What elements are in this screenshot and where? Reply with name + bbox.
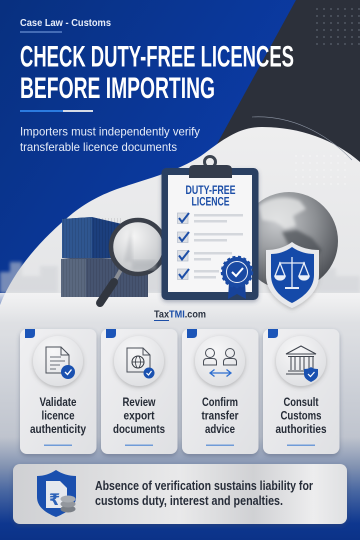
callout text: customs duty, interest and penalties. bbox=[95, 494, 283, 508]
card label: authenticity bbox=[30, 422, 86, 436]
icon: approval seal bbox=[222, 257, 252, 299]
card label: licence bbox=[42, 408, 75, 422]
title: BEFORE IMPORTING bbox=[20, 72, 215, 105]
icon: shield with rupee document and coins bbox=[37, 470, 76, 517]
subtitle: Importers must independently verify bbox=[20, 124, 200, 138]
callout text: Absence of verification sustains liability for bbox=[95, 479, 313, 493]
background: dot grid bbox=[313, 6, 360, 50]
card label: advice bbox=[205, 422, 235, 436]
card tab bbox=[106, 329, 116, 338]
card tab bbox=[268, 329, 278, 338]
clipboard clip bbox=[189, 156, 232, 178]
callout text bbox=[95, 479, 313, 508]
card tab bbox=[187, 329, 197, 338]
card label bbox=[30, 395, 86, 436]
card: validate licence authenticity bbox=[20, 329, 96, 454]
background: floor band bbox=[0, 293, 360, 323]
bottom container bbox=[61, 257, 148, 297]
clipboard paper bbox=[168, 175, 252, 292]
card label: documents bbox=[113, 422, 165, 436]
card label: authorities bbox=[276, 422, 327, 436]
icon: shield with rupee document and coins: ₹ bbox=[49, 492, 60, 509]
background: dome dots bbox=[292, 152, 346, 186]
icon: justice shield bbox=[266, 242, 319, 308]
card: review export documents bbox=[101, 329, 178, 454]
icon: globe document bbox=[114, 336, 164, 386]
clipboard board bbox=[162, 168, 258, 300]
card: consult customs authorities bbox=[263, 329, 340, 454]
card tab bbox=[25, 329, 35, 338]
background: faint skyline bbox=[0, 262, 360, 293]
background: dome orbit line bbox=[252, 117, 352, 160]
card label: export bbox=[124, 408, 154, 422]
icon: globe bbox=[240, 192, 338, 290]
card label: Validate bbox=[40, 395, 77, 409]
card label bbox=[276, 395, 327, 436]
title bbox=[20, 40, 294, 105]
icon: shipping containers bbox=[61, 217, 148, 297]
subtitle: transferable licence documents bbox=[20, 140, 177, 154]
background: dark wedge bbox=[200, 0, 360, 175]
top container bbox=[62, 217, 122, 258]
icon: magnifying glass bbox=[100, 220, 165, 303]
card label bbox=[113, 395, 165, 436]
callout: liability warning bbox=[13, 464, 347, 524]
card: confirm transfer advice bbox=[182, 329, 258, 454]
card label: Customs bbox=[280, 408, 322, 422]
card label: Review bbox=[122, 395, 156, 409]
title rule bbox=[20, 110, 93, 112]
checklist bbox=[178, 213, 243, 280]
clipboard heading: DUTY-FREE bbox=[186, 185, 236, 197]
background: light dome and lower gradient bbox=[0, 127, 360, 540]
illustration: clipboard bbox=[162, 156, 258, 300]
icon: two people with transfer arrow bbox=[195, 336, 245, 386]
clipboard heading: LICENCE bbox=[192, 196, 230, 208]
clipboard heading bbox=[186, 185, 236, 208]
kicker: Case Law - Customs: Case Law - Customs bbox=[20, 17, 111, 29]
card label: Consult bbox=[284, 395, 318, 409]
card label bbox=[202, 395, 239, 436]
subtitle bbox=[20, 124, 200, 154]
brand: TaxTMI.com: TaxTMI.com bbox=[154, 310, 206, 320]
icon: government building bbox=[276, 336, 326, 386]
card label: transfer bbox=[202, 408, 239, 422]
scales glyph bbox=[275, 257, 309, 288]
icon: document with check bbox=[33, 336, 83, 386]
card label: Confirm bbox=[202, 395, 238, 409]
